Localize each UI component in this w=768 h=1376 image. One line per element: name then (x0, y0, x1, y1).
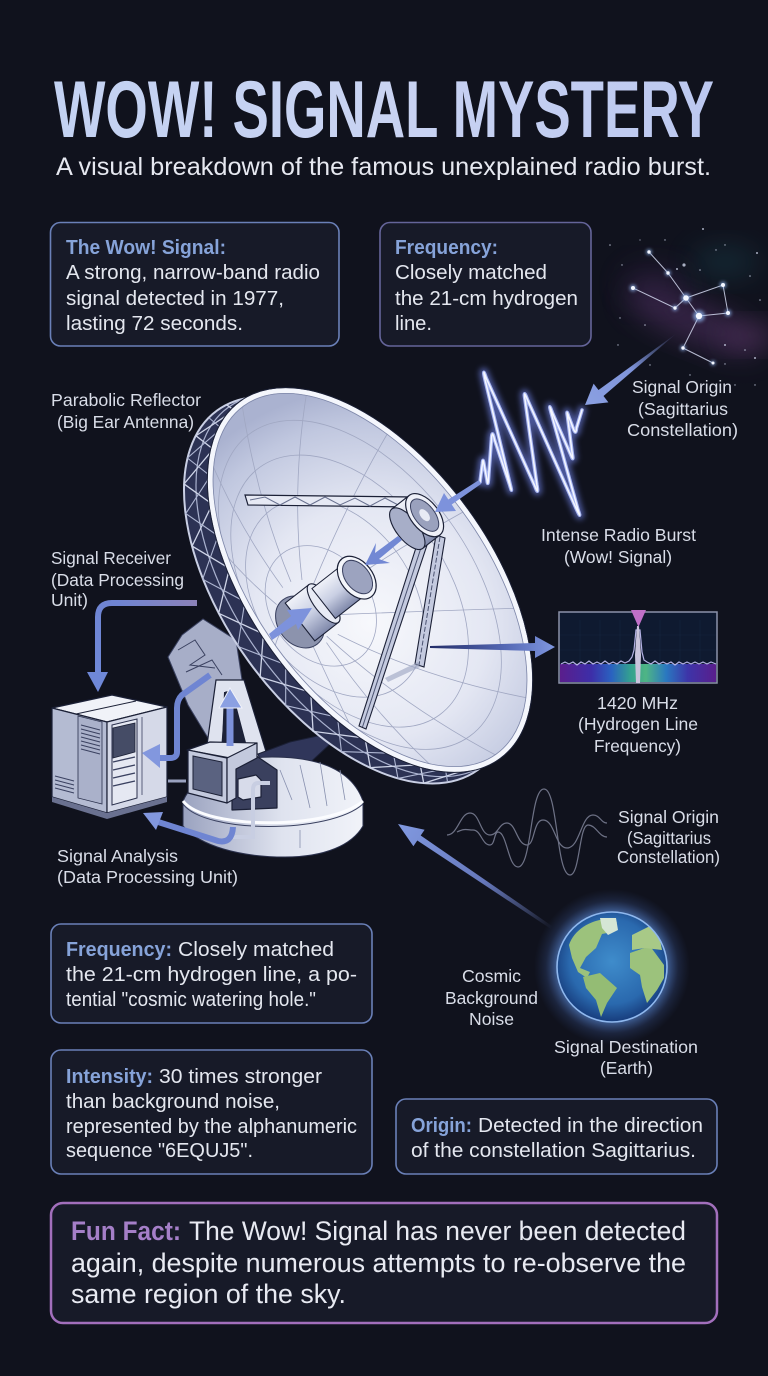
label: signal analysis (57, 846, 238, 887)
panel: frequency top: Closely matched (395, 262, 547, 284)
label: signal destination (554, 1037, 698, 1078)
label: intense radio burst: Intense Radio Burst (541, 525, 696, 545)
arrow: control box up to mount (219, 688, 242, 746)
panel: fun fact: again, despite numerous attempts to re-observe the (71, 1248, 686, 1278)
label: intense radio burst: (Wow! Signal) (564, 547, 672, 567)
label: signal receiver (51, 548, 184, 610)
panel: the wow signal: lasting 72 seconds. (66, 313, 243, 335)
panel: frequency top: line. (395, 313, 432, 335)
panel: intensity: represented by the alphanumeric (66, 1116, 357, 1138)
panel: fun fact: The Wow! Signal has never been detected (189, 1216, 686, 1246)
panel: frequency lower: tential "cosmic watering hole." (66, 989, 316, 1011)
dish lattice truss (118, 333, 584, 841)
icon: earth (534, 889, 690, 1045)
label: signal origin top: Signal Origin (632, 377, 732, 397)
panel: intensity (51, 1050, 372, 1174)
arrow: sub-reflector to feed horn (365, 536, 402, 565)
arrow: constellation to waveform (585, 333, 677, 405)
arrow: mount to server (142, 675, 210, 768)
panel: frequency lower (51, 924, 372, 1023)
label: signal origin lower (617, 807, 720, 867)
icon: control box (168, 742, 277, 837)
icon: data server (52, 695, 167, 819)
panel: frequency lower: Closely matched (178, 939, 334, 961)
label: hydrogen line frequency: (Hydrogen Line (578, 714, 698, 734)
illustration: sub-reflector (383, 487, 451, 555)
label: signal origin top: Constellation) (627, 420, 738, 440)
label: signal receiver: Unit) (51, 590, 88, 610)
chart: 1420 MHz spectrum (559, 610, 717, 683)
panel: the wow signal: signal detected in 1977, (66, 288, 284, 310)
icon: sagittarius constellation (609, 228, 768, 386)
panel: fun fact (51, 1203, 717, 1323)
panel: frequency top (380, 222, 591, 346)
icon: radio burst waveform (480, 372, 582, 515)
arrow: waveform to sub-reflector (435, 480, 481, 512)
label: signal origin top (627, 377, 738, 440)
label: parabolic reflector: (Big Ear Antenna) (57, 412, 194, 432)
arrow: dish to signal receiver (87, 603, 197, 692)
panel: intensity: than background noise, (66, 1091, 280, 1113)
dish reflector surface (206, 387, 533, 773)
arrow: base to server (143, 812, 233, 841)
panel: fun fact: Fun Fact: (71, 1216, 181, 1246)
illustration: big ear dish (183, 387, 533, 784)
panel: frequency top: the 21-cm hydrogen (395, 288, 578, 310)
illustration: receiver feed horn (265, 546, 387, 658)
arrow: dish to spectrum (430, 636, 555, 658)
panel: origin: of the constellation Sagittarius. (411, 1140, 696, 1162)
panel: frequency lower: the 21-cm hydrogen line, a po- (66, 964, 357, 986)
illustration: antenna mount (168, 619, 345, 772)
illustration: antenna base drum (183, 757, 363, 857)
panel: intensity: 30 times stronger (159, 1066, 322, 1088)
label: parabolic reflector (51, 390, 201, 432)
panel: origin: Origin: (411, 1115, 472, 1137)
icon: background noise waves (447, 789, 607, 875)
label: hydrogen line frequency: 1420 MHz (597, 693, 678, 713)
illustration: feed support struts (245, 495, 445, 729)
label: cosmic background noise: Background (445, 988, 538, 1008)
panel: intensity: sequence "6EQUJ5". (66, 1140, 253, 1162)
panel: intensity: Intensity: (66, 1066, 153, 1088)
label: signal destination: (Earth) (600, 1058, 653, 1078)
panel: the wow signal (50, 222, 339, 346)
label: signal destination: Signal Destination (554, 1037, 698, 1057)
label: cosmic background noise: Noise (469, 1009, 514, 1029)
label: signal origin lower: Signal Origin (618, 807, 719, 827)
panel: frequency lower: Frequency: (66, 939, 172, 961)
label: cosmic background noise (445, 966, 538, 1029)
label: signal origin lower: (Sagittarius (627, 828, 711, 848)
label: intense radio burst (541, 525, 696, 567)
label: hydrogen line frequency: Frequency) (594, 736, 681, 756)
arrow: feed horn to mount (269, 608, 312, 640)
panel: fun fact: same region of the sky. (71, 1279, 346, 1309)
arrow: earth to base (398, 824, 552, 929)
label: cosmic background noise: Cosmic (462, 966, 521, 986)
panel: origin: Detected in the direction (478, 1115, 703, 1137)
panel: the wow signal: The Wow! Signal: (66, 237, 226, 259)
label: signal origin lower: Constellation) (617, 847, 720, 867)
label: parabolic reflector: Parabolic Reflector (51, 390, 201, 410)
label: signal receiver: Signal Receiver (51, 548, 171, 568)
label: signal receiver: (Data Processing (51, 570, 184, 590)
panel: the wow signal: A strong, narrow-band radio (66, 262, 320, 284)
label: signal analysis: Signal Analysis (57, 846, 178, 866)
label: hydrogen line frequency (578, 693, 698, 756)
panel: frequency top: Frequency: (395, 237, 498, 259)
panel: origin (396, 1099, 717, 1174)
subtitle: A visual breakdown of the famous unexplained radio burst. (56, 153, 711, 181)
label: signal analysis: (Data Processing Unit) (57, 867, 238, 887)
label: signal origin top: (Sagittarius (638, 399, 728, 419)
